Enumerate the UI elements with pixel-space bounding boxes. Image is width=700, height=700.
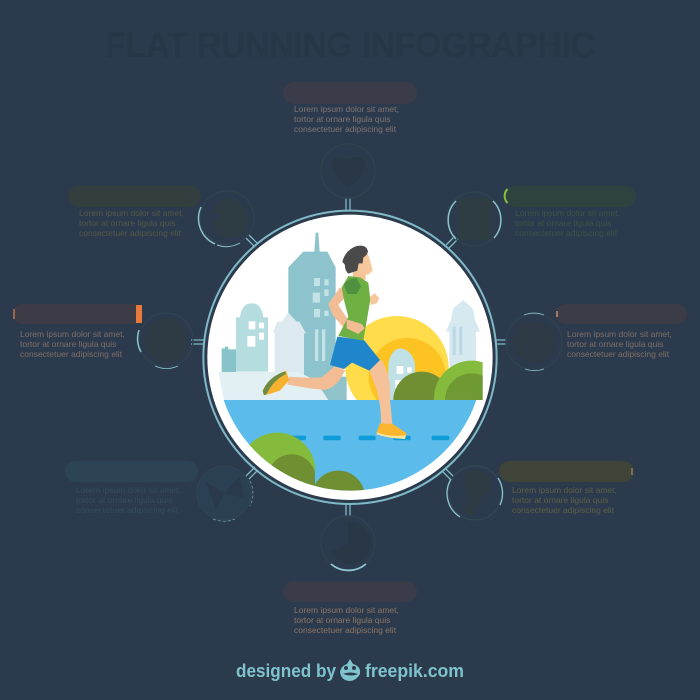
label bar <box>13 304 143 324</box>
tall building <box>288 233 336 400</box>
text block: consectetuer adipiscing elit <box>76 505 179 515</box>
icon: bottom circle <box>321 516 375 570</box>
text block <box>512 485 617 515</box>
road dashes <box>289 436 449 440</box>
text block: consectetuer adipiscing elit <box>20 349 123 359</box>
text block <box>567 329 672 359</box>
text block: tortor at ornare ligula quis <box>515 218 611 228</box>
face <box>357 253 373 275</box>
shorts <box>330 337 380 371</box>
road <box>224 400 476 491</box>
hair <box>342 246 368 274</box>
shirt <box>338 276 370 341</box>
text block <box>294 104 399 134</box>
front leg <box>367 360 393 427</box>
text block: Lorem ipsum dolor sit amet, <box>512 485 617 495</box>
arm <box>328 287 365 334</box>
panel: bottom item <box>283 516 417 635</box>
connectors <box>191 198 507 516</box>
text block: tortor at ornare ligula quis <box>294 615 390 625</box>
runner <box>263 246 407 439</box>
back shoe <box>263 371 289 395</box>
panel: lower right item <box>447 461 634 520</box>
text block: tortor at ornare ligula quis <box>79 218 175 228</box>
text block: consectetuer adipiscing elit <box>512 505 615 515</box>
label bar <box>283 82 417 104</box>
text block: Lorem ipsum dolor sit amet, <box>515 208 620 218</box>
small teal block <box>222 347 236 372</box>
label bar <box>499 461 634 482</box>
text block: tortor at ornare ligula quis <box>20 339 116 349</box>
text block: consectetuer adipiscing elit <box>294 625 397 635</box>
small building in sun <box>388 348 415 400</box>
right pale building <box>446 300 480 367</box>
text block: Lorem ipsum dolor sit amet, <box>294 605 399 615</box>
panel: lower left item <box>65 461 253 521</box>
text block: Lorem ipsum dolor sit amet, <box>79 208 184 218</box>
text block <box>294 605 399 635</box>
text block: tortor at ornare ligula quis <box>567 339 663 349</box>
white disc <box>207 215 493 500</box>
front shoe <box>377 423 407 438</box>
panel: upper right item <box>447 186 636 246</box>
text block: consectetuer adipiscing elit <box>294 124 397 134</box>
icon: lower right circle <box>447 466 503 520</box>
bushes lower left <box>250 432 364 491</box>
ground base <box>218 372 328 400</box>
text block: consectetuer adipiscing elit <box>515 228 618 238</box>
footer credit <box>236 659 464 681</box>
text block: Lorem ipsum dolor sit amet, <box>567 329 672 339</box>
neck <box>353 265 366 280</box>
text block <box>515 208 620 238</box>
back leg <box>287 366 345 390</box>
text block: Lorem ipsum dolor sit amet, <box>20 329 125 339</box>
label bar <box>505 186 636 207</box>
icon: right circle <box>506 313 562 371</box>
text block: tortor at ornare ligula quis <box>512 495 608 505</box>
title: FLAT RUNNING INFOGRAPHIC <box>105 26 595 65</box>
text block: consectetuer adipiscing elit <box>79 228 182 238</box>
text block <box>76 485 181 515</box>
icon: lower left circle <box>197 466 253 521</box>
text block: consectetuer adipiscing elit <box>567 349 670 359</box>
icon: left circle <box>138 313 193 368</box>
footer credit: designed by <box>236 661 336 681</box>
panel: top item <box>283 82 417 198</box>
text block <box>79 208 184 238</box>
footer credit: freepik.com <box>365 661 464 681</box>
label bar <box>283 581 417 602</box>
icon: freepik bird <box>340 659 360 681</box>
text block <box>20 329 125 359</box>
icon: upper left circle <box>199 191 254 247</box>
icon: upper right circle <box>447 192 501 246</box>
panel: right item <box>506 304 687 371</box>
sun <box>345 316 449 400</box>
label bar <box>65 461 198 482</box>
panel: upper left item <box>68 186 254 247</box>
outer ring <box>203 211 497 504</box>
hand front <box>370 293 379 305</box>
text block: Lorem ipsum dolor sit amet, <box>294 104 399 114</box>
domed building <box>236 303 268 372</box>
text block: tortor at ornare ligula quis <box>76 495 172 505</box>
central illustration <box>200 211 509 524</box>
panel: left item <box>13 304 193 368</box>
label bar <box>68 186 201 207</box>
text block: Lorem ipsum dolor sit amet, <box>76 485 181 495</box>
middle pale building <box>273 313 306 380</box>
label bar <box>556 304 687 324</box>
skyline <box>218 233 480 400</box>
text block: tortor at ornare ligula quis <box>294 114 390 124</box>
icon: top circle <box>321 144 375 198</box>
front arm forearm over shirt <box>347 319 365 334</box>
bushes right <box>393 372 440 400</box>
